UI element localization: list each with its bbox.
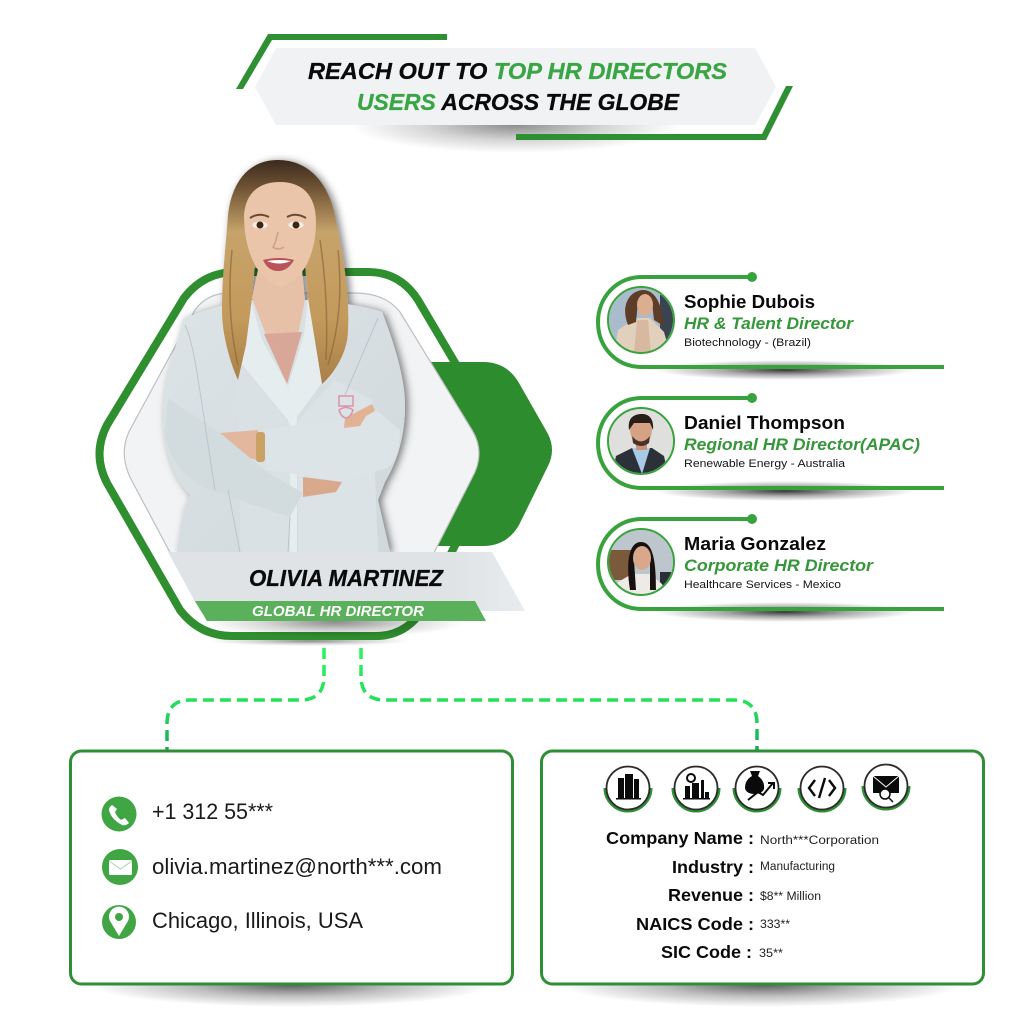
SIC row: SIC Code :: [661, 942, 752, 962]
company name row: Company Name :: [606, 828, 754, 848]
name: OLIVIA MARTINEZ: [249, 565, 444, 591]
panel: Sophie Dubois: HR & Talent Director: [684, 315, 855, 333]
NAICS row: NAICS Code :: [636, 914, 754, 934]
crossed arms: [220, 430, 262, 462]
hexagon inner panel: [124, 293, 479, 590]
avatar: [608, 287, 676, 353]
panel: featured profile hexagon: [100, 160, 552, 646]
industry row: Manufacturing: [760, 861, 835, 873]
hair: [222, 160, 348, 384]
panel: Daniel Thompson: [598, 393, 944, 501]
phone number: +1 312 55***: [152, 799, 273, 824]
icon: revenue money bag: [734, 766, 780, 811]
icon: company buildings: [605, 766, 651, 811]
panel: Maria Gonzalez: Corporate HR Director: [684, 557, 875, 575]
icon: phone: [102, 796, 136, 832]
panel: Daniel Thompson: Daniel Thompson: [684, 413, 845, 433]
panel: Sophie Dubois: Sophie Dubois: [684, 292, 815, 312]
icon: NAICS code brackets: [799, 766, 845, 811]
industry row: Industry :: [672, 857, 754, 877]
portrait: woman in white coat: [163, 160, 405, 552]
panel: contact details: [70, 751, 512, 1007]
company name row: [606, 828, 879, 848]
panel: Maria Gonzalez: [598, 514, 944, 622]
icon: email: [102, 849, 138, 885]
revenue row: Revenue :: [668, 885, 754, 905]
ring shadow: [210, 636, 410, 646]
title banner: [236, 34, 793, 153]
role: GLOBAL HR DIRECTOR: [252, 603, 424, 620]
arrow: dark green hexagon tab: [425, 362, 552, 546]
revenue row: $8** Million: [760, 891, 821, 903]
neck and scrubs: [252, 270, 305, 335]
face: [244, 182, 316, 287]
panel: Sophie Dubois: Biotechnology - (Brazil): [684, 337, 811, 349]
title banner: REACH OUT TO TOP HR DIRECTORS: [308, 58, 728, 84]
revenue row: [668, 885, 821, 905]
SIC row: 35**: [759, 948, 784, 960]
panel: Maria Gonzalez: Healthcare Services - Mexico: [684, 579, 841, 591]
avatar: [608, 408, 674, 474]
NAICS row: 333**: [760, 919, 791, 931]
name band shadow: [205, 606, 465, 638]
industry row: [672, 857, 835, 877]
icon: location pin: [102, 905, 136, 939]
icon: SIC code envelope: [863, 764, 909, 809]
name band: [168, 552, 525, 611]
panel: Daniel Thompson: Regional HR Director(APAC): [684, 436, 921, 454]
arrow: dashed connector to company box: [361, 648, 757, 750]
email address: olivia.martinez@north***.com: [152, 854, 442, 879]
hexagon outer ring: [100, 272, 490, 636]
arrow: dashed connector to contact box: [167, 648, 324, 750]
avatar: [608, 529, 674, 595]
panel: company details: [542, 751, 984, 1007]
icon: industry factory: [673, 766, 719, 811]
company name row: North***Corporation: [760, 835, 879, 847]
sleeve and seam lines: [185, 318, 378, 552]
title banner: USERS ACROSS THE GLOBE: [357, 89, 680, 115]
panel: Maria Gonzalez: Maria Gonzalez: [684, 534, 826, 554]
panel: Daniel Thompson: Renewable Energy - Australia: [684, 458, 846, 470]
panel: Sophie Dubois: [598, 272, 944, 380]
location: Chicago, Illinois, USA: [152, 908, 363, 933]
lapels: [234, 298, 297, 552]
role ribbon: [195, 601, 486, 621]
